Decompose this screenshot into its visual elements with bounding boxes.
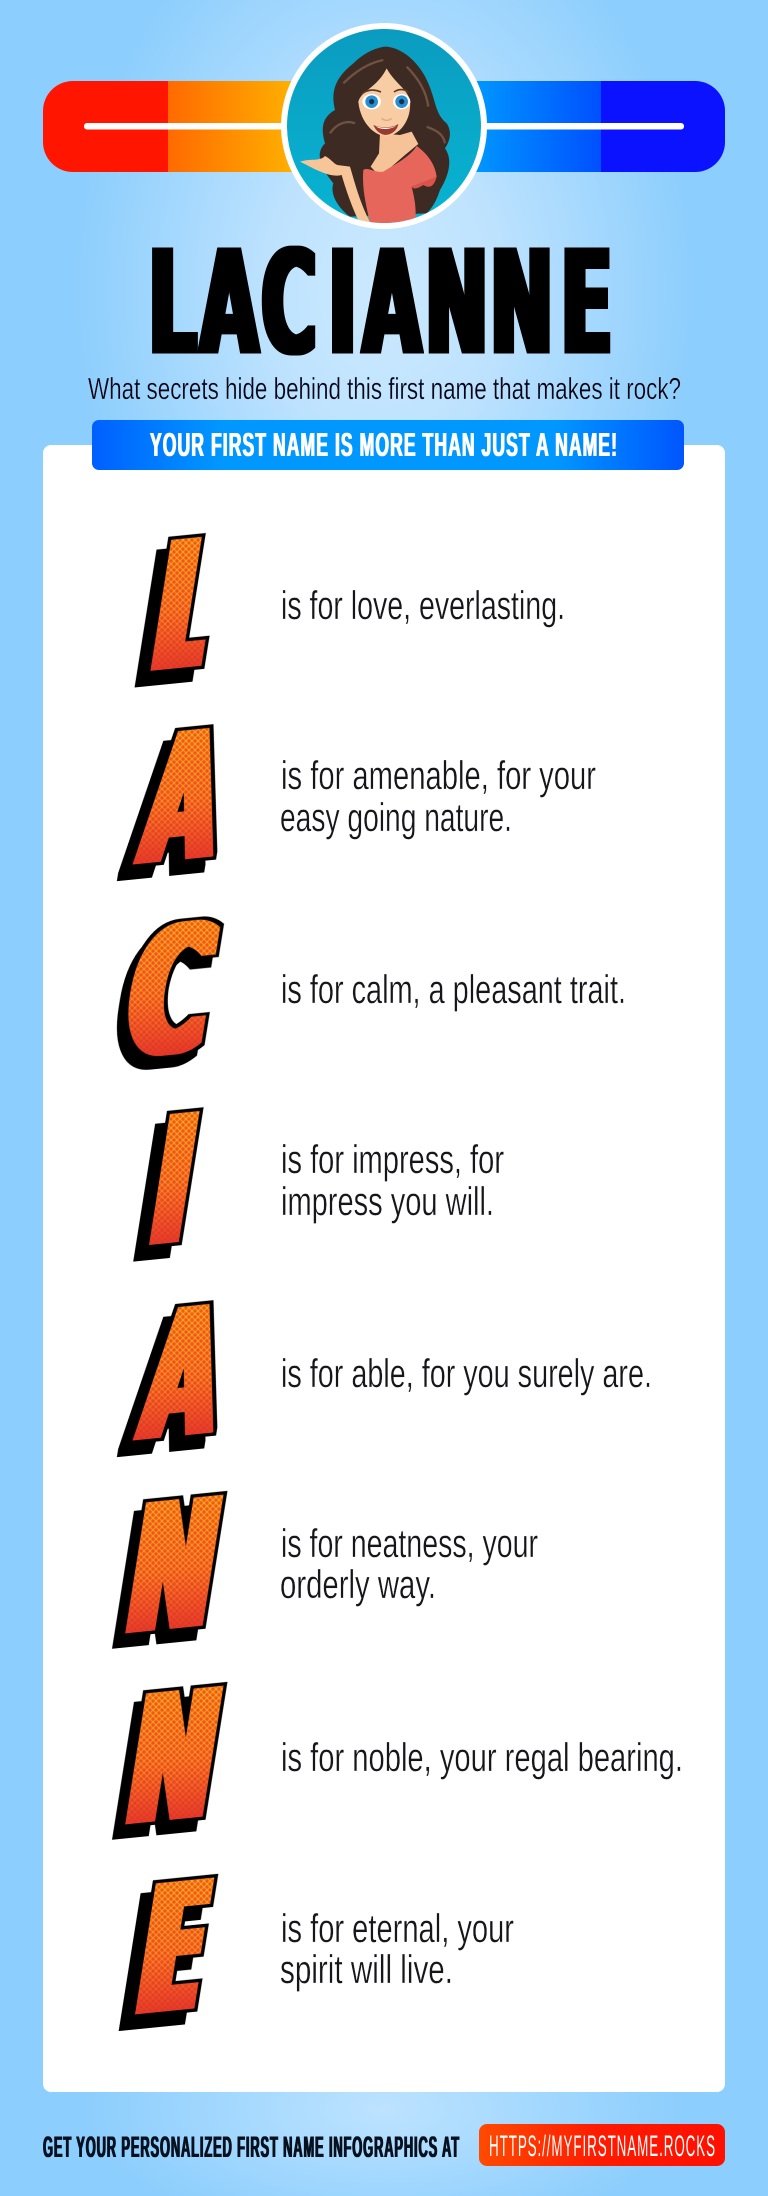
header colour bar [43, 81, 725, 172]
nose [382, 118, 392, 120]
letter A: A [131, 1267, 235, 1482]
text A [280, 754, 596, 840]
row: N second [110, 1651, 683, 1867]
face [358, 68, 410, 137]
text I: is for impress, for [281, 1138, 504, 1182]
sleeve [412, 177, 437, 188]
eyes [362, 94, 381, 109]
hair highlights [330, 60, 445, 143]
text N: is for neatness, your [281, 1522, 538, 1566]
text E: is for eternal, your [281, 1907, 514, 1951]
neck and chest [371, 132, 418, 177]
letter A [116, 724, 218, 882]
row: I [130, 1077, 504, 1288]
text N: orderly way. [280, 1563, 436, 1607]
row: E [115, 1844, 514, 2057]
letter I: I [142, 1077, 206, 1288]
text N [280, 1522, 538, 1607]
letter L: L [148, 501, 220, 712]
letter E: E [129, 1844, 218, 2057]
avatar portrait [281, 23, 487, 229]
text A: easy going nature. [280, 796, 512, 840]
letter A: A [131, 691, 235, 906]
brows [362, 90, 409, 94]
text E: spirit will live. [280, 1948, 453, 1992]
text C: is for calm, a pleasant trait. [281, 968, 626, 1012]
hair [320, 47, 450, 217]
row: C [110, 885, 626, 1099]
arm and hand [300, 156, 371, 223]
row: L [130, 501, 565, 712]
text I [281, 1138, 504, 1224]
banner [92, 420, 684, 470]
row: A second [115, 1267, 652, 1482]
letter N: N [115, 1460, 232, 1676]
letter L [134, 532, 210, 688]
letter C: C [115, 885, 227, 1099]
row: N [110, 1460, 538, 1676]
shirt [363, 146, 437, 223]
footer URL button [479, 2124, 725, 2166]
letter N: N [115, 1651, 232, 1867]
row: A [115, 691, 596, 906]
mouth [373, 124, 398, 135]
text E [280, 1907, 514, 1992]
text A: is for amenable, for your [281, 754, 596, 798]
white content panel [43, 445, 725, 2092]
title: name: LACIANNE [149, 220, 612, 388]
text I: impress you will. [281, 1180, 494, 1224]
letter C [116, 916, 224, 1070]
text L: is for love, everlasting. [281, 584, 565, 628]
